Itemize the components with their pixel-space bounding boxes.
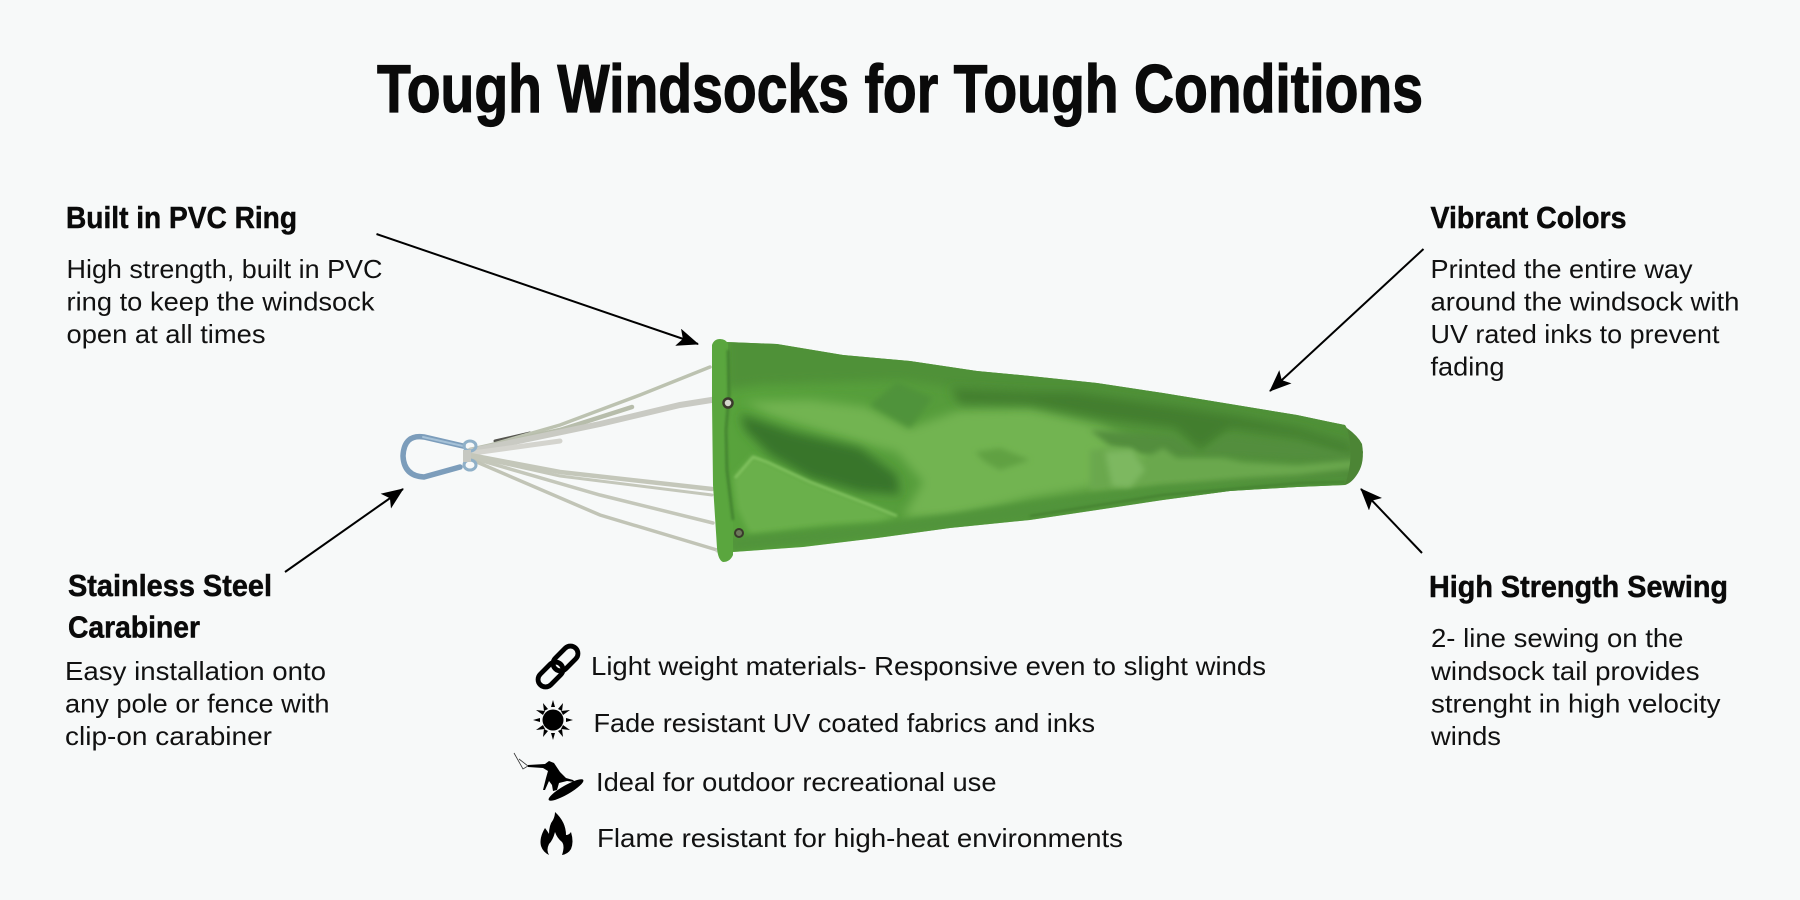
icon: wakeboarder	[514, 753, 586, 804]
callout: Built in PVC Ring: High strength, built in PVC	[66, 254, 382, 284]
feature: fade resistant	[533, 700, 1095, 740]
callout: Vibrant Colors: Printed the entire way	[1430, 254, 1692, 284]
icon: flame	[540, 812, 572, 855]
callout: Stainless Steel Carabiner: Carabiner	[68, 610, 200, 644]
callout: High Strength Sewing: winds	[1430, 721, 1501, 751]
PVC ring hem	[712, 339, 733, 562]
fabric body	[722, 330, 1363, 552]
callout: Built in PVC Ring	[66, 200, 382, 349]
feature: light weight materials: Light weight materials- Responsive even to slight winds	[591, 651, 1266, 681]
callout: Stainless Steel Carabiner: any pole or fence with	[65, 688, 330, 718]
callout: Vibrant Colors: around the windsock with	[1430, 286, 1740, 316]
callout: Vibrant Colors: UV rated inks to prevent	[1430, 319, 1720, 349]
callout: Stainless Steel Carabiner: Stainless Steel	[68, 568, 272, 603]
callout: High Strength Sewing: High Strength Sewing	[1429, 569, 1728, 604]
callout: Stainless Steel Carabiner	[65, 568, 330, 751]
grommets	[724, 398, 732, 408]
feature: flame resistant	[540, 812, 1123, 855]
callout: Built in PVC Ring: Built in PVC Ring	[66, 200, 297, 235]
ropes	[466, 367, 738, 551]
callout: High Strength Sewing: strenght in high velocity	[1431, 688, 1720, 718]
feature: flame resistant: Flame resistant for high-heat environments	[597, 823, 1123, 853]
feature: light weight materials	[535, 643, 1266, 690]
tail hem	[1345, 428, 1363, 485]
icon: sun	[533, 700, 573, 740]
arrow: to windsock tail	[1361, 489, 1422, 553]
feature: outdoor recreational: Ideal for outdoor recreational use	[596, 767, 996, 797]
arrow: to vibrant colors fabric	[1270, 249, 1424, 391]
callout: High Strength Sewing: 2- line sewing on the	[1431, 623, 1684, 653]
title: Tough Windsocks for Tough Conditions	[377, 51, 1423, 127]
arrow: to carabiner	[285, 489, 403, 572]
callout: Vibrant Colors: Vibrant Colors	[1430, 200, 1626, 235]
callout: Built in PVC Ring: ring to keep the windsock	[66, 286, 376, 316]
callout: High Strength Sewing	[1429, 569, 1728, 751]
arrow: to PVC ring	[376, 234, 698, 344]
callout: High Strength Sewing: windsock tail provides	[1430, 656, 1700, 686]
feature: outdoor recreational	[514, 753, 996, 804]
callout: Built in PVC Ring: open at all times	[66, 319, 266, 349]
callout: Stainless Steel Carabiner: Easy installation onto	[65, 656, 326, 686]
carabiner	[403, 437, 476, 477]
icon: chain link	[535, 643, 581, 690]
callout: Vibrant Colors	[1430, 200, 1740, 382]
feature: fade resistant: Fade resistant UV coated fabrics and inks	[594, 708, 1095, 738]
callout: Stainless Steel Carabiner: clip-on carabiner	[65, 721, 272, 751]
windsock illustration	[403, 330, 1363, 562]
callout: Vibrant Colors: fading	[1430, 352, 1504, 382]
